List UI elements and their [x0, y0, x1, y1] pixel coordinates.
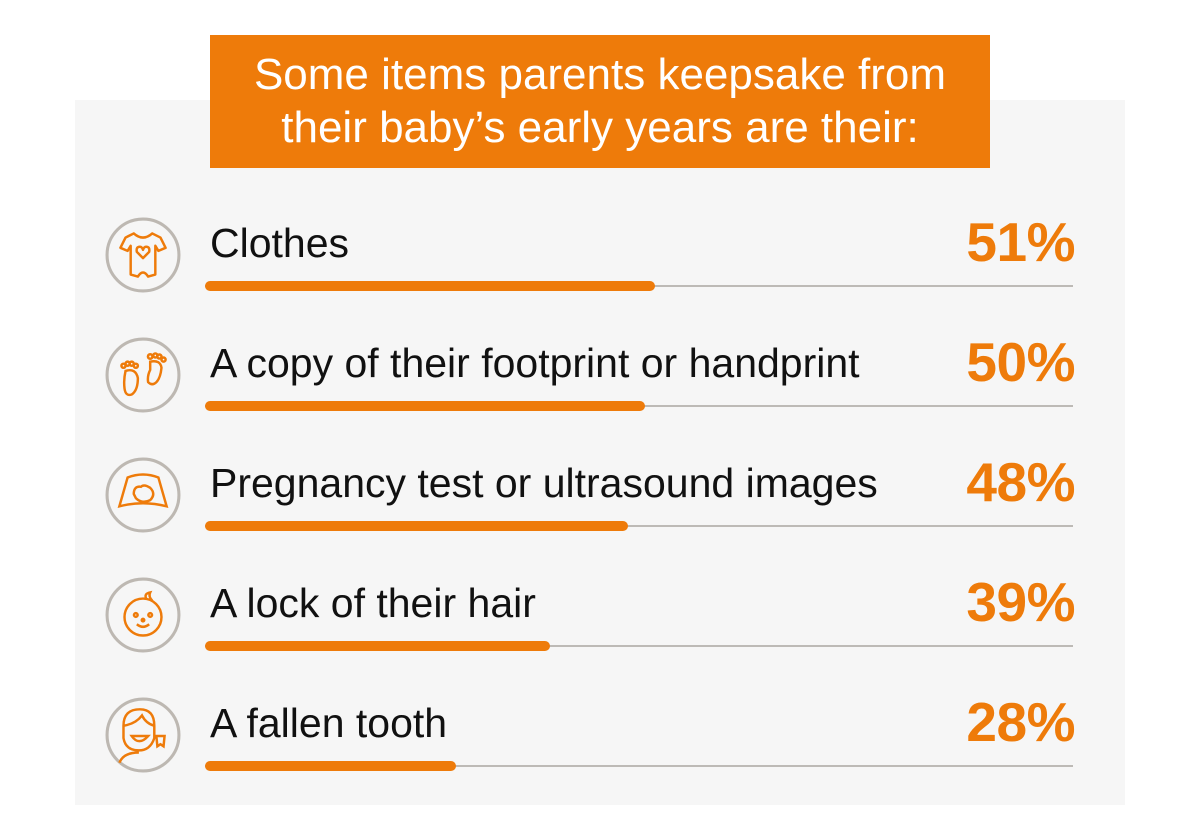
percentage: 48%: [966, 451, 1075, 513]
icon: feet: [106, 338, 180, 412]
row: clothes: [106, 211, 1075, 292]
percentage: 50%: [966, 331, 1075, 393]
background panel: [75, 100, 1125, 805]
row: tooth: [106, 691, 1075, 772]
label: Pregnancy test or ultrasound images: [210, 460, 878, 506]
icon: baby face: [106, 578, 180, 652]
bar 50%: [205, 401, 645, 411]
bar 39%: [205, 641, 550, 651]
icon: ultrasound: [106, 458, 180, 532]
title: Some items parents keepsake from: [254, 50, 946, 99]
row: footprint: [106, 331, 1075, 412]
icon: child with tooth: [106, 698, 180, 772]
percentage: 28%: [966, 691, 1075, 753]
percentage: 39%: [966, 571, 1075, 633]
bar 28%: [205, 761, 456, 771]
icon: onesie: [106, 218, 180, 292]
bar 48%: [205, 521, 628, 531]
label: A lock of their hair: [210, 580, 536, 626]
label: A copy of their footprint or handprint: [210, 340, 860, 386]
percentage: 51%: [966, 211, 1075, 273]
row: hair: [106, 571, 1075, 652]
label: Clothes: [210, 220, 349, 266]
label: A fallen tooth: [210, 700, 447, 746]
title: [210, 35, 990, 168]
bar 51%: [205, 281, 655, 291]
title: their baby’s early years are their:: [281, 103, 919, 152]
row: ultrasound: [106, 451, 1075, 532]
